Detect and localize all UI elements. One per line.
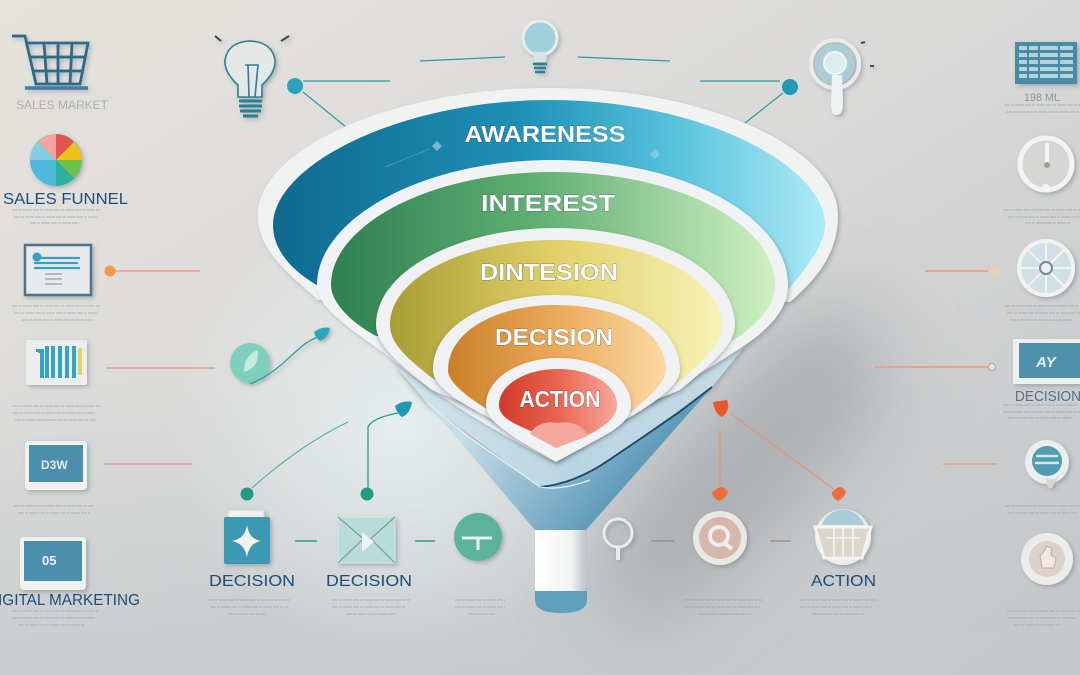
label: table: 198 ML [1024,92,1060,104]
icon: table [1015,42,1077,84]
icon: small lightbulb [523,21,557,72]
description: decision one [208,600,290,614]
connector: circle to basket [770,540,791,542]
connector: bar chart [106,367,215,369]
label: decision two: DECISION [326,573,412,590]
icon: letter circle [693,511,747,565]
icon: envelope [338,517,395,563]
icon: wheel [1019,241,1073,295]
connector: envelope to circle [415,540,435,542]
stage: action [486,358,631,462]
icon: hanging knob [811,40,874,115]
description: list pin [1005,506,1080,513]
label: action: ACTION [811,573,876,590]
monitor text: AY [1035,354,1058,371]
connector: tablet [104,463,192,465]
orange connectors [712,400,846,501]
icon: report card [25,245,91,295]
icon: list pin [1025,440,1069,488]
connector: monitor [875,364,996,370]
icon: green badge [454,513,502,561]
icon: teal pin [230,328,330,384]
stage: intention [376,228,735,440]
description: wheel [1005,306,1080,320]
icon: shopping cart [12,36,88,88]
connector: pin to circle [651,540,674,542]
icon: bar chart card [26,340,87,385]
label: awareness: AWARENESS [464,121,626,147]
spout [535,528,587,613]
icon: ring pin [604,519,632,560]
tablet two text: 05 [42,553,56,568]
action blob [530,422,588,448]
label: sales funnel: SALES FUNNEL [3,191,128,208]
funnel [258,88,838,613]
icon: basket [815,509,871,565]
label: interest: INTEREST [481,190,615,216]
stage: awareness [258,88,838,302]
description: letter circle [684,600,762,614]
funnel cone and spout [395,340,750,613]
icon: thumb badge [1021,533,1073,585]
icon: clock [1020,138,1072,192]
top connector lines [287,57,798,127]
label: action: ACTION [520,386,600,412]
description: thumb badge [1007,611,1080,625]
connectors: green decision nodes [240,402,412,500]
connector: wheel [925,266,1000,276]
label: decision: DECISION [495,324,613,350]
connector: report [104,266,200,276]
description: clock [1003,210,1080,223]
description: bar chart [12,406,100,420]
tablet text: D3W [41,458,68,472]
label: sales market: SALES MARKET [16,98,109,112]
description: report [12,306,100,320]
icon: monitor [1013,339,1080,384]
description: table [1004,105,1080,112]
icon: tablet two [20,537,86,590]
description: digital marketing [12,611,98,625]
connector: list pin [943,463,997,465]
icon: pie chart [30,134,82,186]
description: decision two [332,600,410,614]
icon: teal folder [224,510,270,564]
label: intention: DINTESION [480,259,618,285]
description: green badge [455,600,505,614]
description: tablet [14,506,94,513]
stage: interest [317,160,788,462]
stage: decision [433,295,680,458]
icon: lightbulb [215,36,289,116]
description: monitor [1003,405,1080,418]
icon: tablet [25,441,87,490]
description: action [800,600,876,614]
connector: folder to envelope [295,540,317,542]
label: decision one: DECISION [209,573,295,590]
description: sales funnel [12,210,100,223]
